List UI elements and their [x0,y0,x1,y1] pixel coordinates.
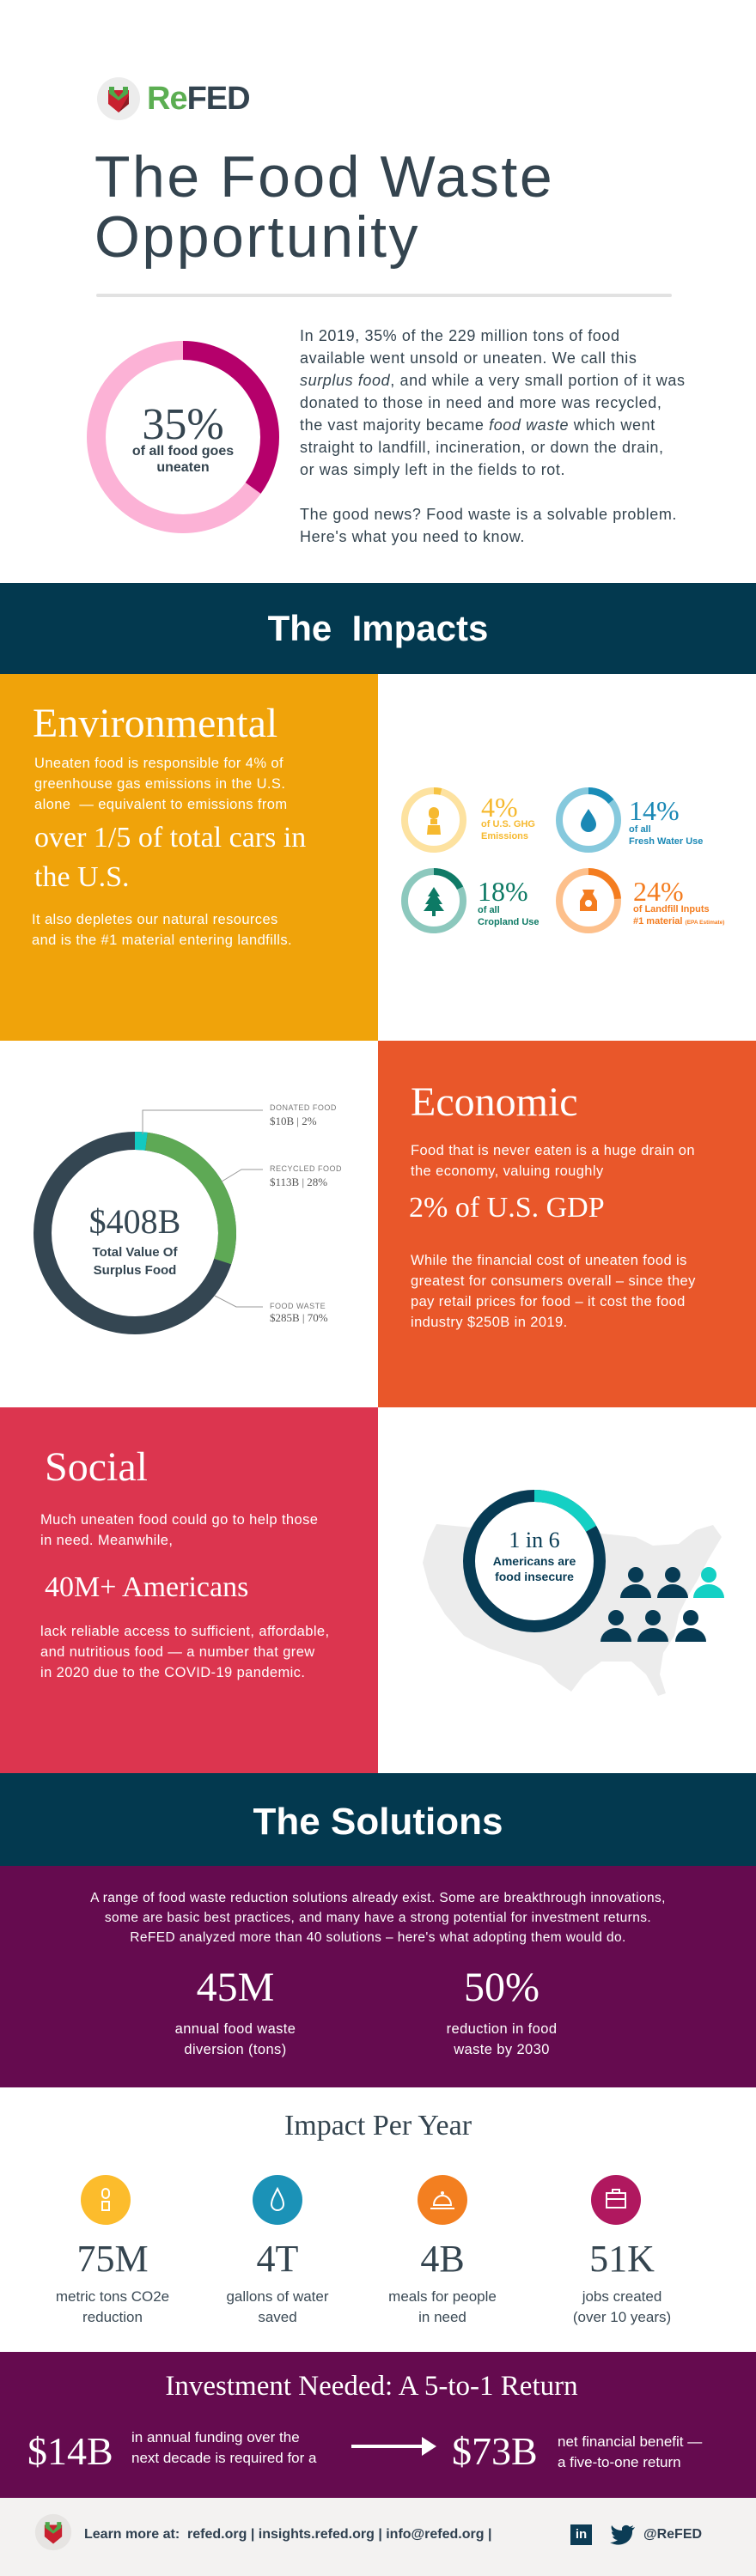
stat: 75M: 75M [76,2238,149,2280]
footer: @ReFED [643,2527,702,2542]
stat: 50%: 50% [464,1965,540,2010]
intro paragraph: The good news? Food waste is a solvable problem. [300,506,677,523]
panel: economic: industry $250B in 2019. [411,1315,568,1330]
graphic: food insecurity map: Americans are [493,1554,576,1568]
chart: surplus food donut: RECYCLED FOOD [270,1164,342,1173]
panel: social: in 2020 due to the COVID-19 pandemic. [40,1665,305,1680]
donut: 35% uneaten [87,341,279,533]
stat: landfill: 24% [633,876,684,907]
panel: economic: pay retail prices for food – it cost the food [411,1294,686,1309]
panel: social: in need. Meanwhile, [40,1533,173,1548]
panel: solutions summary [0,1866,756,2087]
panel: investment needed: in annual funding over the [131,2429,300,2445]
stat: 75M [56,2175,169,2325]
title [94,144,554,270]
stat: 51K: (over 10 years) [573,2309,671,2325]
panel: solutions summary: some are basic best practices, and many have a strong potential for investment returns. [105,1911,651,1925]
panel: social: lack reliable access to sufficient, affordable, [40,1624,329,1639]
chart: surplus food donut: DONATED FOOD [270,1103,337,1112]
stat: cropland [401,868,540,933]
stat: 45M [175,1965,296,2057]
intro paragraph: or was simply left in the fields to rot. [300,461,565,478]
stat: 4T [226,2175,329,2325]
band: The Solutions: The Solutions [253,1801,503,1843]
panel: environmental: alone — equivalent to emissions from [34,797,288,812]
divider [96,294,672,297]
stat: 51K: jobs created [582,2288,662,2305]
intro paragraph: straight to landfill, incineration, or down the drain, [300,439,664,456]
panel: environmental: It also depletes our natural resources [32,912,278,927]
panel: investment needed [0,2352,756,2498]
panel: economic: Economic [411,1079,578,1125]
stat: 45M: annual food waste [175,2021,296,2037]
icon: linkedin: in [576,2527,587,2542]
stat: 50%: reduction in food [447,2021,557,2037]
stat: 51K [573,2175,671,2325]
footer [0,2498,756,2576]
stat: 4T: saved [258,2309,297,2325]
chart: surplus food donut [34,1103,342,1334]
graphic: food insecurity map: food insecure [495,1570,574,1583]
panel: social [0,1407,378,1773]
footer logo [35,2514,71,2550]
stat: cropland: 18% [478,876,528,907]
panel: economic [378,1041,756,1407]
panel: environmental: and is the #1 material entering landfills. [32,933,292,948]
panel: investment needed: $14B [27,2429,113,2473]
panel: environmental stats [401,787,725,933]
stat: 51K: 51K [589,2238,655,2280]
logo: ReFED [147,81,250,117]
title: Opportunity [94,204,420,270]
panel: investment needed: next decade is required for a [131,2450,316,2466]
panel: economic: Food that is never eaten is a huge drain on [411,1143,695,1158]
panel: environmental: greenhouse gas emissions in the U.S. [34,776,285,792]
stat: landfill: #1 material (EPA Estimate) [633,916,724,927]
band: The Solutions [0,1773,756,1866]
stat: 50% [447,1965,557,2057]
panel: environmental: the U.S. [34,861,129,893]
donut: 35% uneaten: 35% [142,400,224,449]
stat: 4T: 4T [257,2238,298,2280]
stat: GHG: of U.S. GHG [481,819,535,829]
panel: economic: 2% of U.S. GDP [409,1192,605,1224]
band: The Impacts [0,583,756,674]
donut: 35% uneaten: uneaten [156,460,210,475]
panel: social: 40M+ Americans [45,1571,248,1603]
stat: 75M: metric tons CO2e [56,2288,169,2305]
stat: cropland: of all [478,905,500,915]
stat: 45M: diversion (tons) [184,2042,287,2057]
stat: water: Fresh Water Use [629,836,703,847]
panel: solutions summary: ReFED analyzed more than 40 solutions – here's what adopting them would do. [130,1930,626,1945]
chart: surplus food donut: $408B [89,1202,180,1241]
stat: cropland: Cropland Use [478,917,540,927]
panel: environmental: Uneaten food is responsible for 4% of [34,756,284,771]
chart: surplus food donut: $285B | 70% [270,1311,328,1324]
intro paragraph: surplus food, and while a very small portion of it was [300,372,686,389]
graphic: food insecurity map: 1 in 6 [509,1528,560,1552]
stat: 4B: 4B [420,2238,465,2280]
logo [97,77,250,120]
panel: environmental: over 1/5 of total cars in [34,822,306,854]
stat: water: 14% [629,795,680,826]
panel: social: Social [45,1444,148,1490]
panel: investment needed: Investment Needed: A 5-to-1 Return [165,2371,578,2402]
chart: surplus food donut: Total Value Of [93,1245,177,1260]
panel: economic: greatest for consumers overall – since they [411,1273,696,1289]
intro paragraph: donated to those in need and more was recycled, [300,394,662,411]
panel: social: and nutritious food — a number that grew [40,1644,315,1660]
panel: investment needed: a five-to-one return [558,2454,681,2470]
chart: surplus food donut: FOOD WASTE [270,1302,326,1310]
stat: water [556,787,703,853]
panel: economic: While the financial cost of uneaten food is [411,1253,687,1268]
chart: surplus food donut: Surplus Food [94,1263,176,1278]
stat: 4T: gallons of water [226,2288,329,2305]
stat: 75M: reduction [82,2309,143,2325]
panel: social: Much uneaten food could go to help those [40,1512,318,1528]
chart: surplus food donut: $10B | 2% [270,1115,317,1127]
panel: solutions summary: A range of food waste reduction solutions already exist. Some are breakthrough innovations, [90,1891,666,1905]
stat: water: of all [629,824,651,835]
panel: environmental [0,674,378,1041]
intro paragraph [300,327,686,545]
icon: linkedin [570,2524,592,2545]
donut: 35% uneaten: of all food goes [132,444,234,459]
stat: GHG: 4% [481,792,518,823]
chart: surplus food donut: $113B | 28% [270,1176,327,1188]
stat: GHG: Emissions [481,831,528,841]
impact stats row [56,2175,671,2325]
graphic: food insecurity map [423,1490,724,1696]
panel: economic: the economy, valuing roughly [411,1163,604,1179]
stat: 45M: 45M [197,1965,274,2010]
stat: 50%: waste by 2030 [454,2042,550,2057]
panel: investment needed: net financial benefit — [558,2433,702,2450]
stat: 4B [388,2175,497,2325]
stat: landfill: of Landfill Inputs [633,904,710,914]
arrow [351,2437,436,2456]
panel: environmental: Environmental [33,701,277,746]
panel: investment needed: $73B [452,2429,538,2473]
footer: Learn more at: refed.org | insights.refed.org | info@refed.org | [84,2527,491,2542]
intro paragraph: In 2019, 35% of the 229 million tons of food [300,327,620,344]
intro paragraph: Here's what you need to know. [300,528,525,545]
intro paragraph: available went unsold or uneaten. We call this [300,349,637,367]
intro paragraph: the vast majority became food waste which went [300,416,655,434]
heading: Impact Per Year: Impact Per Year [284,2110,472,2142]
stat: 4B: meals for people [388,2288,497,2305]
icon: twitter [610,2524,635,2545]
stat: landfill [556,868,725,933]
stat: GHG [401,787,535,853]
stat: 4B: in need [418,2309,466,2325]
band: The Impacts: The Impacts [268,608,488,648]
title: The Food Waste [94,144,554,210]
